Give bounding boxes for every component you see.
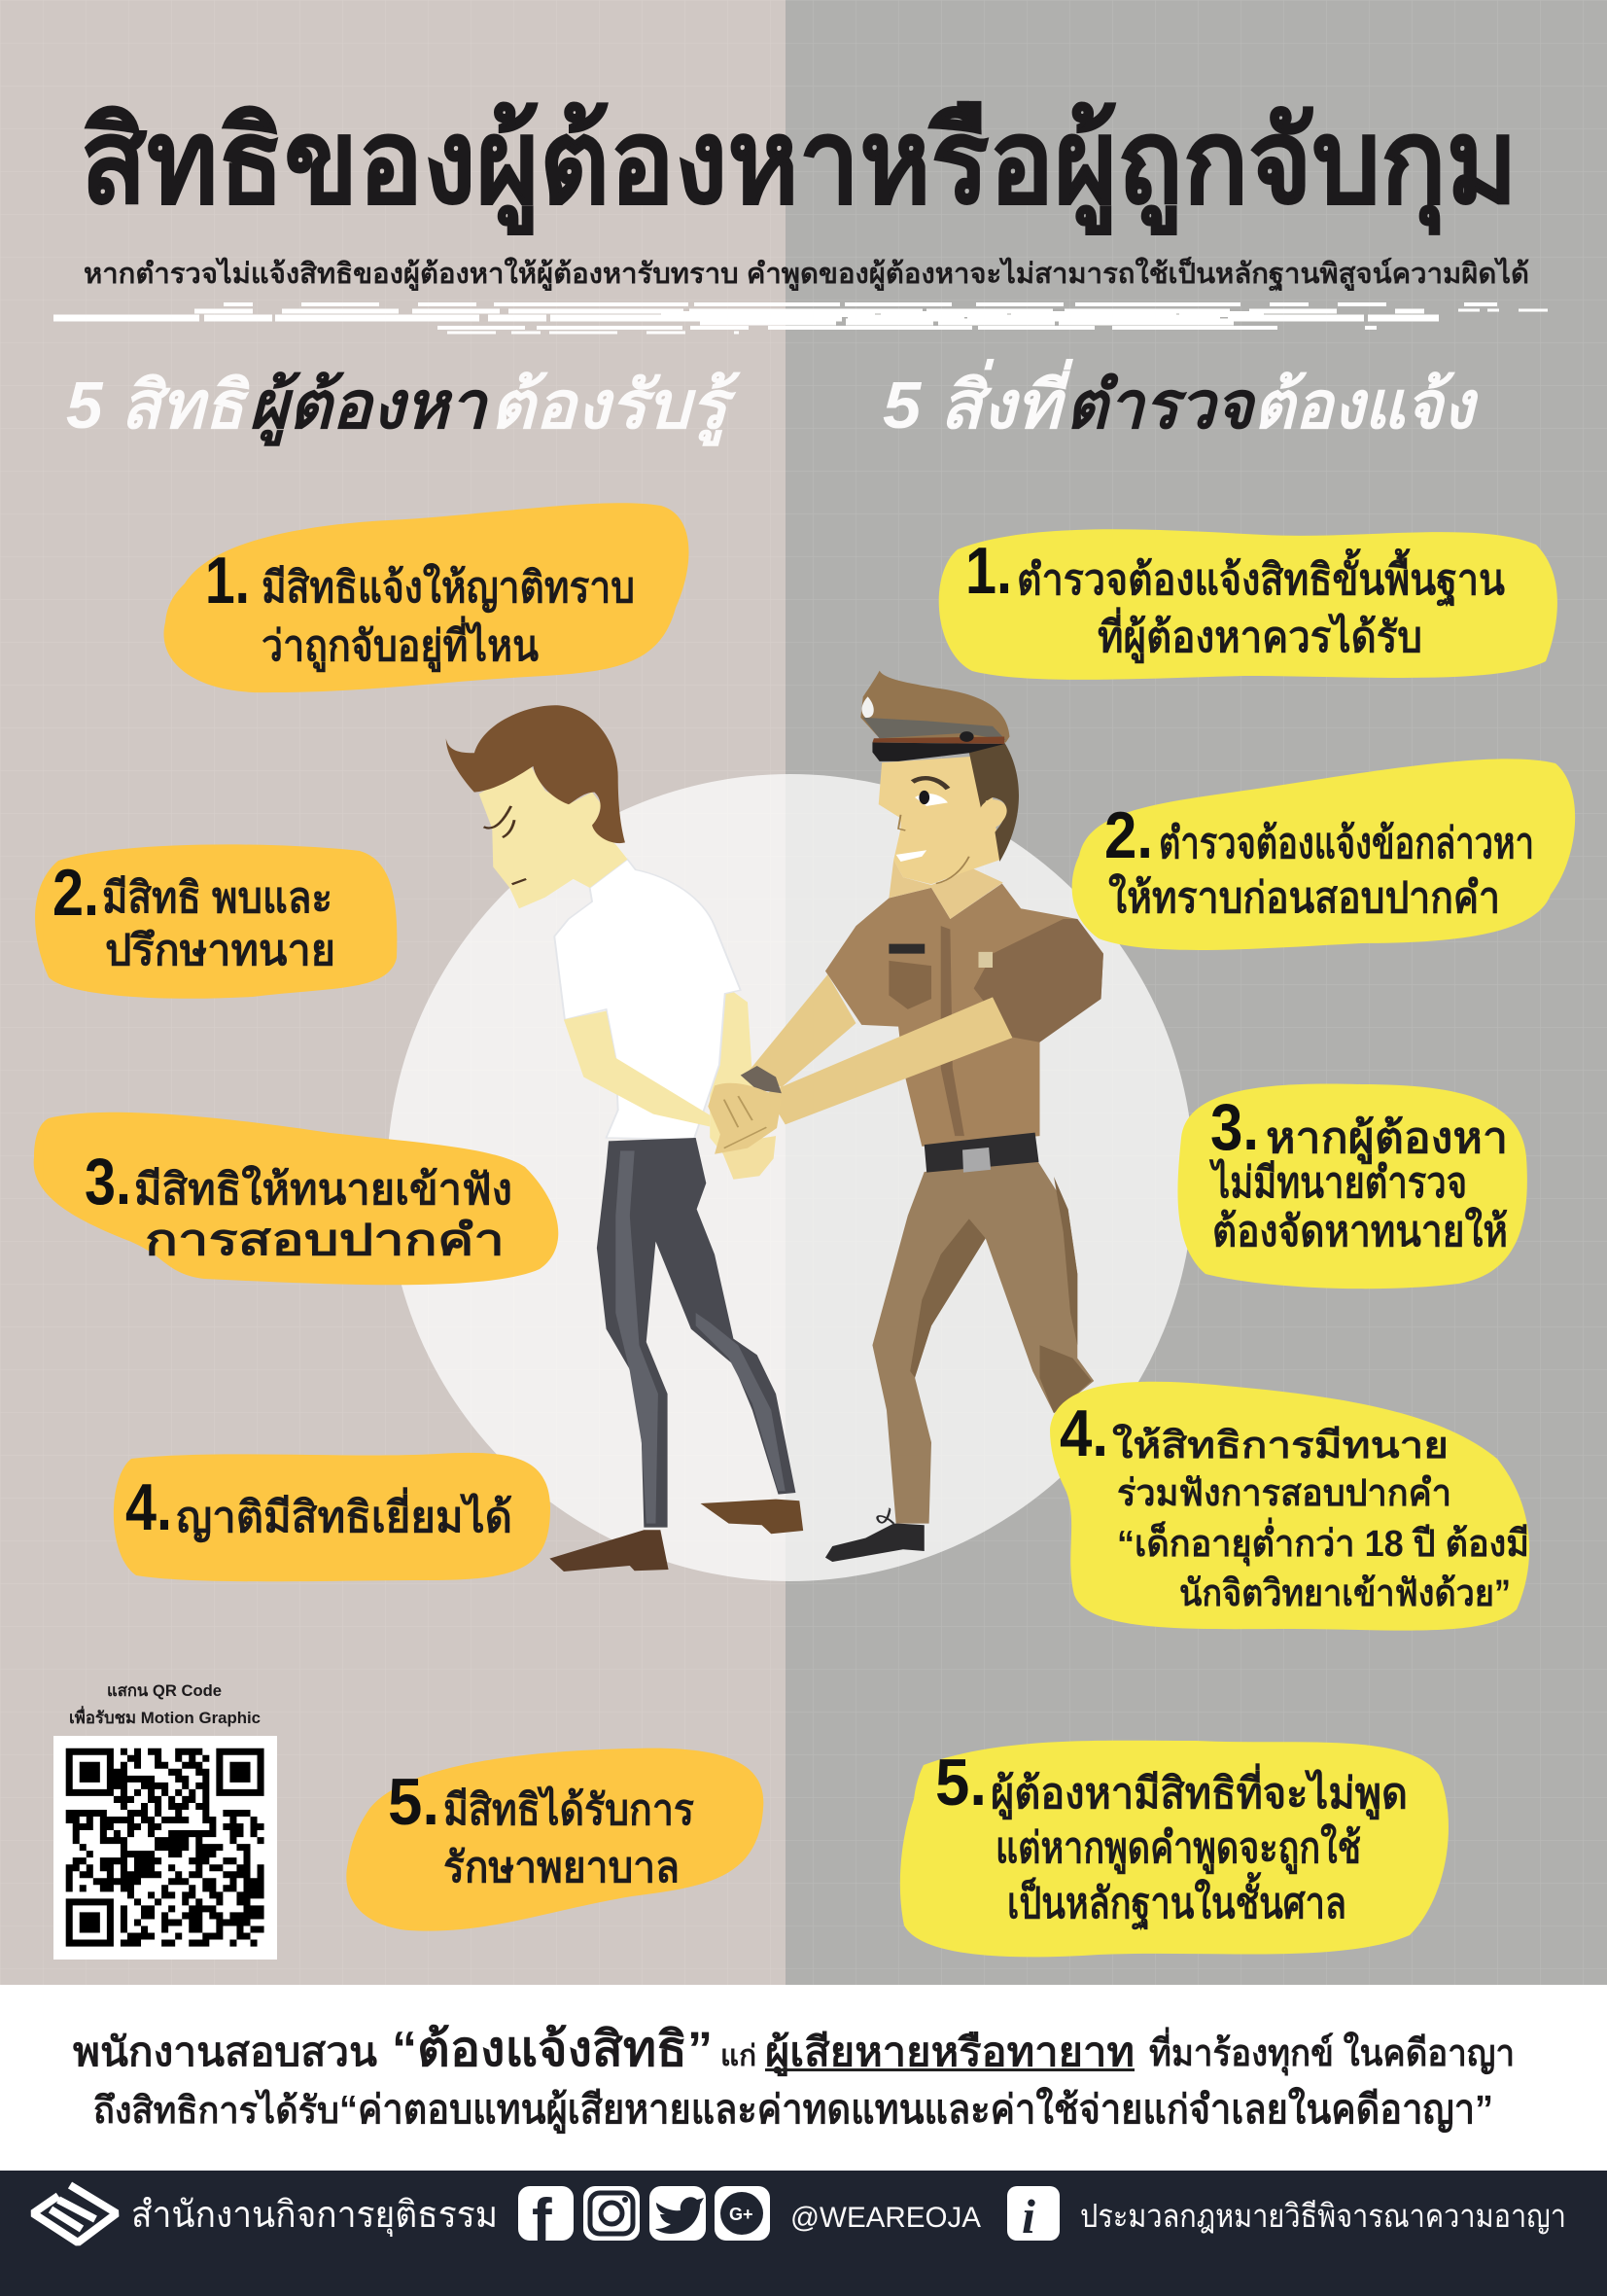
title: สิทธิของผู้ต้องหาหรือผู้ถูกจับกุม <box>81 96 1518 235</box>
text: ญาติมีสิทธิเยี่ยมได้ <box>176 1487 512 1542</box>
left heading: 5 สิทธิ <box>66 369 250 442</box>
text: ปรึกษาทนาย <box>105 927 335 974</box>
background: right panel <box>786 0 1607 1985</box>
panel: police duty 4 <box>1050 1382 1529 1631</box>
text: ตำรวจต้องแจ้งสิทธิขั้นพื้นฐาน <box>1017 548 1505 607</box>
note line 1: ที่มาร้องทุกข์ ในคดีอาญา <box>1149 2027 1515 2076</box>
text <box>262 562 635 672</box>
number: 5. <box>388 1765 439 1839</box>
panel: police duty 5 <box>900 1741 1449 1957</box>
icon: google plus: G+ <box>729 2205 753 2224</box>
left heading <box>66 369 742 446</box>
text: มีสิทธิให้ทนายเข้าฟัง <box>134 1164 512 1214</box>
number: 5. <box>935 1746 987 1819</box>
number: 1. <box>205 544 250 618</box>
number: 4. <box>1060 1396 1108 1470</box>
note line 2: ถึงสิทธิการได้รับ <box>93 2089 339 2132</box>
note line 1: แก่ <box>720 2040 756 2072</box>
text: มีสิทธิ พบและ <box>102 874 332 922</box>
office name: สำนักงานกิจการยุติธรรม <box>131 2195 498 2237</box>
note line 1: พนักงานสอบสวน <box>73 2030 377 2074</box>
note line 2: “ค่าตอบแทนผู้เสียหายและค่าทดแทนและค่าใช้จ่ายแก่จำเลยในคดีอาญา” <box>339 2086 1493 2135</box>
QR caption: เพื่อรับชม Motion Graphic <box>69 1706 261 1727</box>
text: แต่หากพูดคำพูดจะถูกใช้ <box>996 1822 1361 1874</box>
icon: twitter <box>649 2186 706 2241</box>
number: 3. <box>85 1145 131 1219</box>
text <box>102 874 335 974</box>
right heading <box>883 359 1479 442</box>
text: “เด็กอายุต่ำกว่า 18 ปี ต้องมี <box>1117 1517 1529 1567</box>
note line 1 <box>73 2022 1515 2077</box>
subtitle: หากตำรวจไม่แจ้งสิทธิของผู้ต้องหาให้ผู้ต้องหารับทราบ คำพูดของผู้ต้องหาจะไม่สามารถใช้เป็นหลักฐานพิสูจน์ความผิดได้ <box>84 256 1529 292</box>
text: ให้สิทธิการมีทนาย <box>1112 1424 1449 1466</box>
text: เป็นหลักฐานในชั้นศาล <box>1007 1871 1346 1930</box>
text: หากผู้ต้องหา <box>1266 1114 1508 1164</box>
handle: @WEAREOJA <box>790 2202 981 2234</box>
text: ต้องจัดหาทนายให้ <box>1212 1206 1508 1255</box>
number: 4. <box>125 1470 172 1544</box>
text: ร่วมฟังการสอบปากคำ <box>1117 1473 1451 1514</box>
panel: police duty 2 <box>1072 759 1575 950</box>
note line 1: “ต้องแจ้งสิทธิ” <box>392 2022 713 2076</box>
QR caption: แสกน QR Code <box>107 1681 222 1700</box>
text: รักษาพยาบาล <box>443 1844 680 1891</box>
panel: police duty 1 <box>939 529 1557 680</box>
number: 2. <box>52 856 99 930</box>
text <box>134 1164 512 1264</box>
text: ไม่มีทนายตำรวจ <box>1209 1157 1467 1207</box>
text: ที่ผู้ต้องหาควรได้รับ <box>1098 607 1422 663</box>
illustration: arrested man <box>446 705 803 1572</box>
text: ให้ทราบก่อนสอบปากคำ <box>1108 872 1500 922</box>
text: มีสิทธิแจ้งให้ญาติทราบ <box>262 562 635 613</box>
icon: info <box>1007 2186 1060 2243</box>
footer band <box>0 2171 1607 2296</box>
left heading: ต้องรับรู้ <box>490 369 742 446</box>
text: นักจิตวิทยาเข้าฟังด้วย” <box>1179 1573 1511 1614</box>
right heading: 5 สิ่งที่ <box>883 359 1073 442</box>
panel: suspect right 4 <box>114 1453 550 1581</box>
text <box>991 1763 1408 1930</box>
icon: google plus <box>715 2186 770 2241</box>
text <box>443 1784 694 1891</box>
QR code <box>53 1736 277 1960</box>
icon: info: i <box>1022 2189 1035 2243</box>
background: left panel <box>0 0 786 1985</box>
right heading: ตำรวจ <box>1066 369 1257 442</box>
text: ว่าถูกจับอยู่ที่ไหน <box>262 616 539 672</box>
number: 3. <box>1210 1090 1259 1164</box>
text <box>1112 1424 1529 1614</box>
white note band <box>0 1985 1607 2171</box>
QR caption <box>69 1681 261 1727</box>
text: มีสิทธิได้รับการ <box>443 1784 694 1834</box>
icon: office logo <box>33 2185 117 2243</box>
left heading: ผู้ต้องหา <box>249 369 489 446</box>
icon: instagram <box>583 2186 640 2241</box>
text <box>1017 548 1505 663</box>
icon: facebook <box>518 2186 574 2254</box>
text <box>1209 1114 1508 1255</box>
text <box>1108 820 1534 922</box>
white brush stroke divider <box>53 304 1554 333</box>
text: การสอบปากคำ <box>145 1217 505 1264</box>
text: ผู้ต้องหามีสิทธิที่จะไม่พูด <box>991 1763 1408 1819</box>
panel: suspect right 5 <box>346 1748 763 1931</box>
number: 2. <box>1104 798 1153 872</box>
panel: police duty 3 <box>1177 1083 1527 1289</box>
note line 1: ผู้เสียหายหรือทายาท <box>765 2030 1135 2077</box>
spotlight circle <box>387 774 1194 1581</box>
panel: suspect right 2 <box>35 844 397 999</box>
right heading: ต้องแจ้ง <box>1253 369 1479 442</box>
panel: suspect right 3 <box>34 1113 558 1285</box>
icon: facebook: f <box>532 2187 552 2254</box>
number: 1. <box>965 534 1012 608</box>
panel: suspect right 1 <box>163 503 689 692</box>
illustration: police officer <box>708 671 1103 1562</box>
